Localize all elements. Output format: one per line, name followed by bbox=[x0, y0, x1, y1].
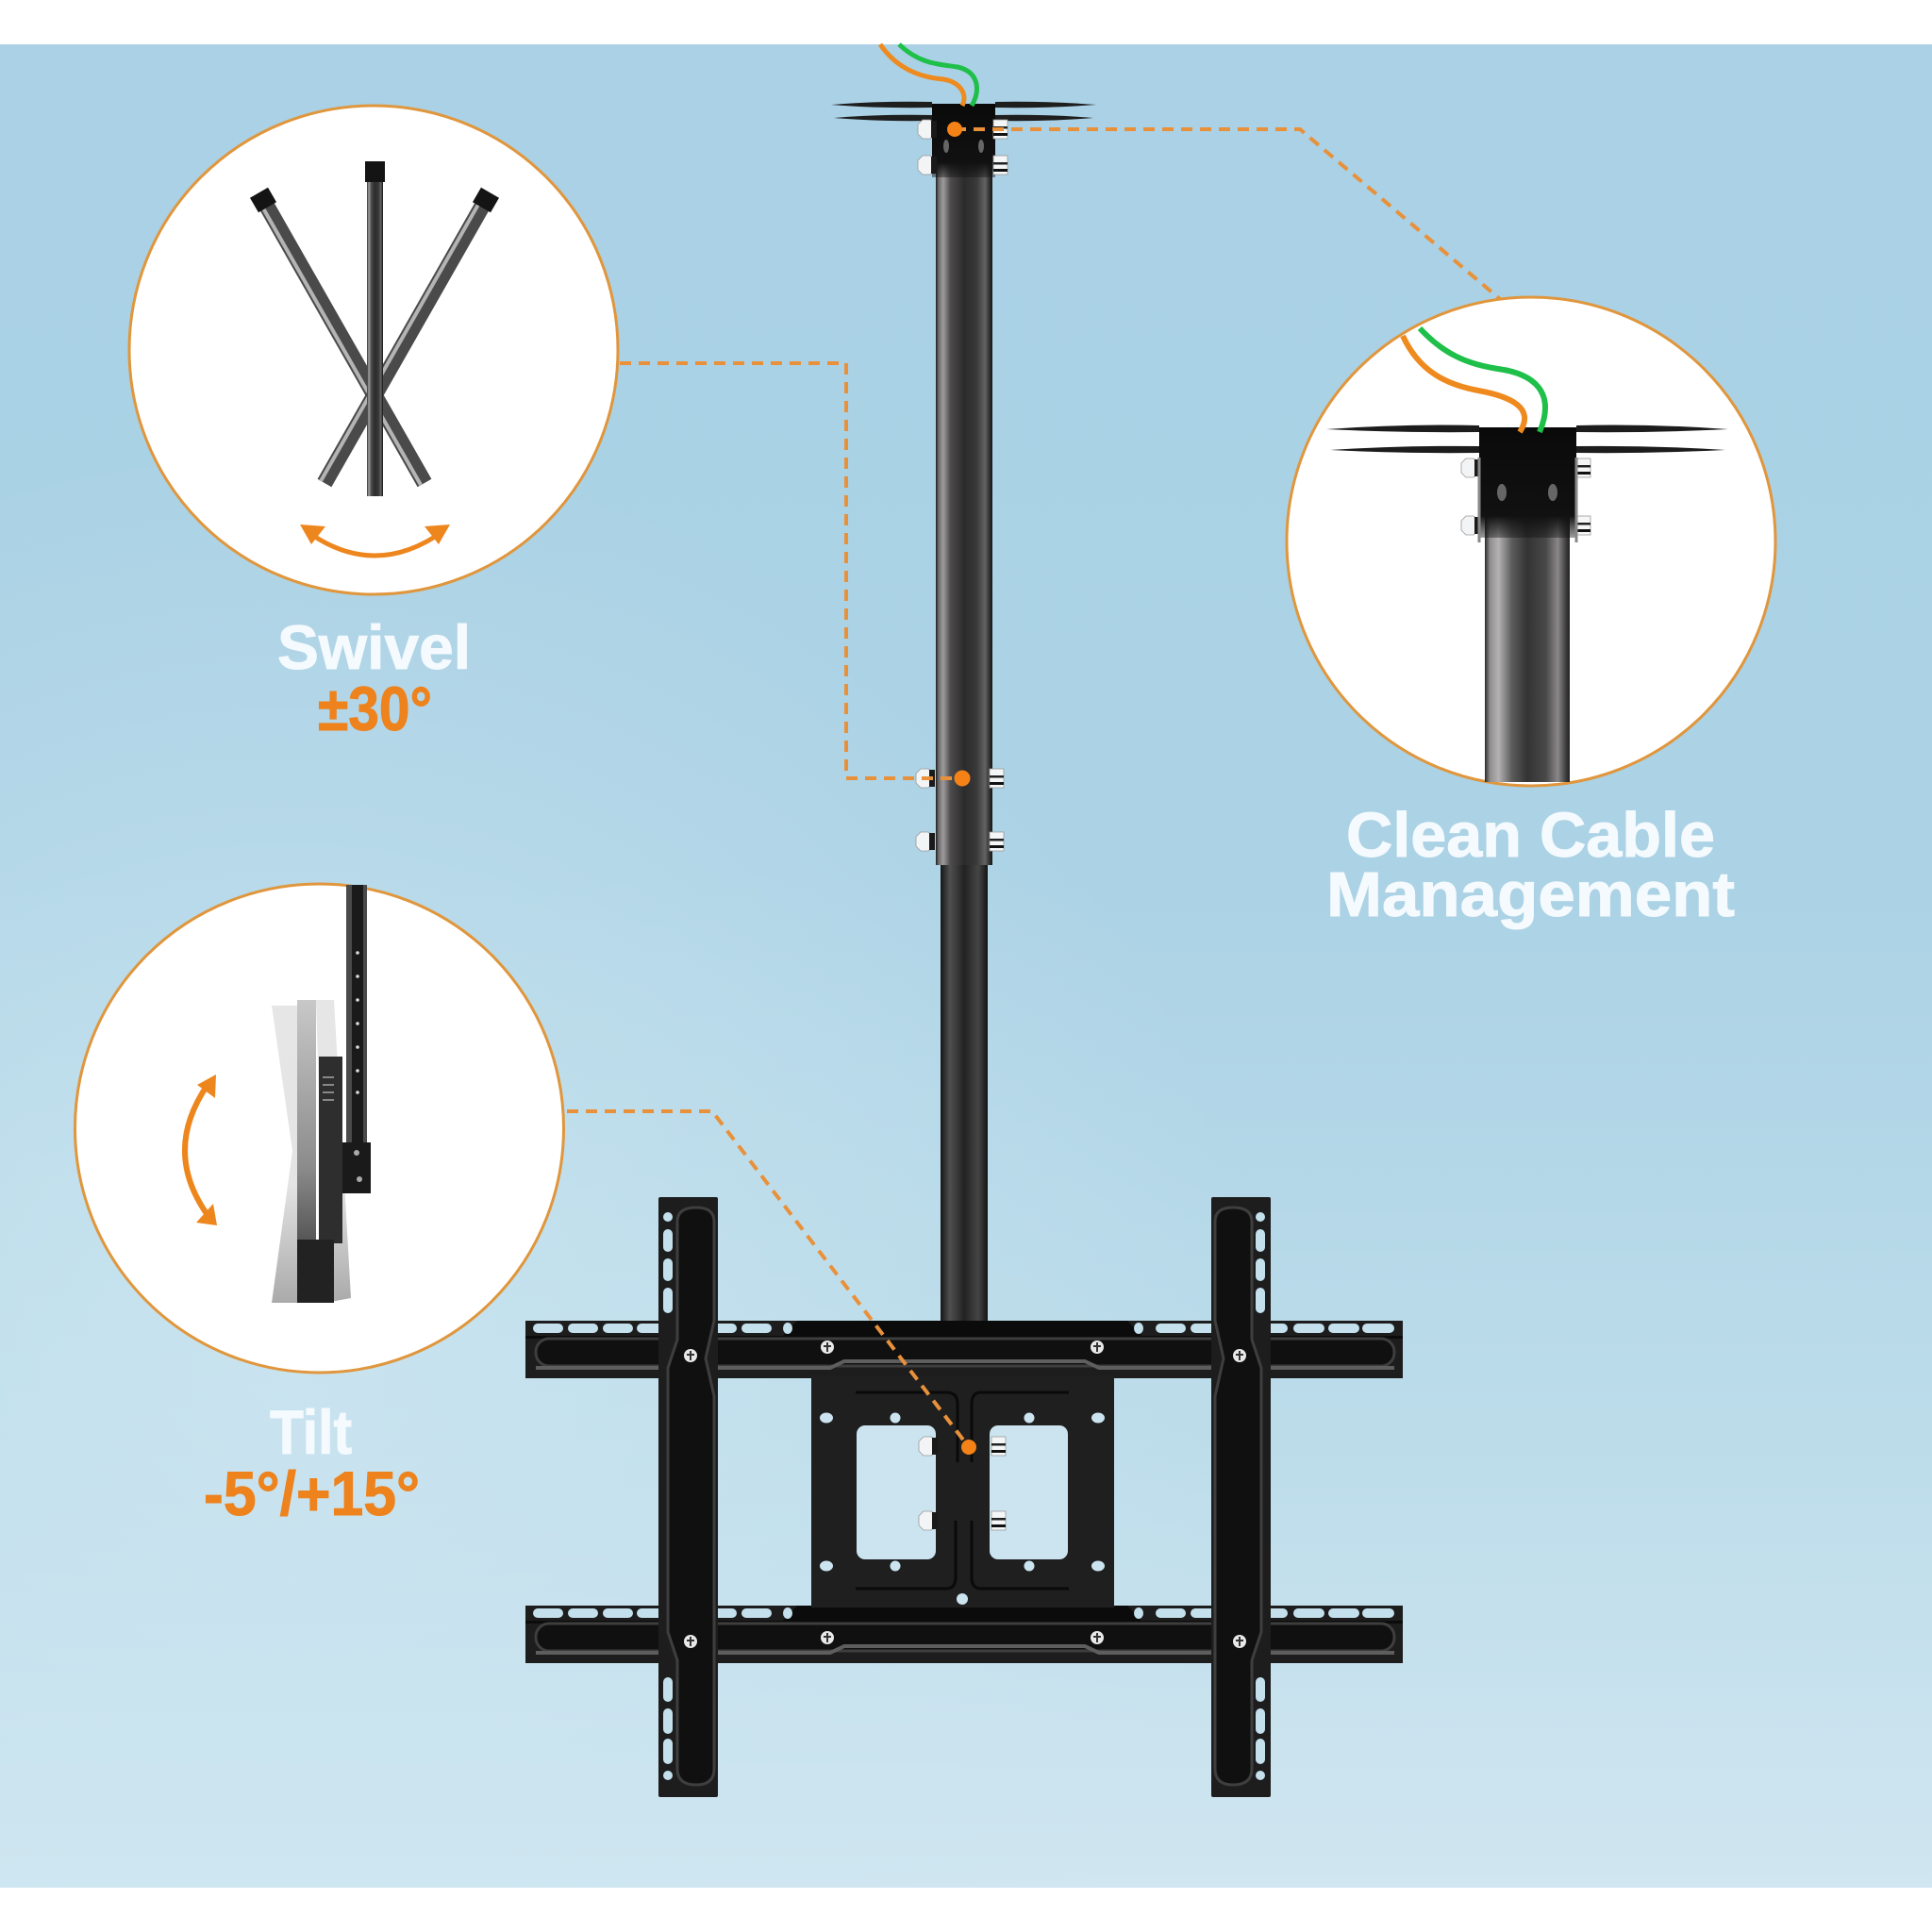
icon: tilt side view bbox=[272, 885, 371, 1303]
label: tilt: Tilt bbox=[270, 1397, 352, 1467]
label: swivel: Swivel bbox=[277, 612, 471, 682]
panel: clean cable management bbox=[1287, 297, 1775, 930]
top horizontal bar bbox=[525, 1321, 1403, 1378]
left vertical rail bbox=[658, 1197, 718, 1797]
upper pole bbox=[932, 104, 995, 865]
icon: three swivel poles bbox=[250, 161, 499, 496]
tilt circle bbox=[75, 884, 564, 1373]
cables: orange and green bbox=[880, 44, 976, 106]
arrow: swivel range bbox=[300, 525, 450, 556]
dashed leader: tilt bbox=[567, 1111, 976, 1455]
label: tilt value: -5°/+15° bbox=[204, 1458, 420, 1528]
arrow: tilt range bbox=[185, 1074, 217, 1225]
lower telescoping pole bbox=[941, 863, 988, 1325]
icon: enlarged pole top bbox=[1326, 425, 1728, 782]
bar screws bbox=[821, 1341, 1104, 1644]
dashed leader: cable management bbox=[947, 122, 1500, 299]
ceiling mount pole bbox=[831, 44, 1096, 1325]
label: swivel value: ±30° bbox=[318, 674, 432, 743]
ceiling plate disc bbox=[831, 102, 1096, 121]
TV wall plate bracket bbox=[525, 1197, 1403, 1797]
panel: swivel bbox=[129, 106, 618, 743]
label: management: Management bbox=[1326, 859, 1735, 930]
icon: cables bbox=[1403, 328, 1545, 432]
center plate with windows bbox=[811, 1375, 1114, 1607]
dashed leader: swivel bbox=[620, 363, 970, 787]
swivel circle bbox=[129, 106, 618, 594]
bottom horizontal bar bbox=[525, 1606, 1403, 1663]
label: clean cable: Clean Cable bbox=[1346, 800, 1715, 871]
panel: tilt bbox=[75, 884, 564, 1528]
cable circle bbox=[1287, 297, 1775, 786]
pole bolts bbox=[916, 120, 1008, 851]
right vertical rail bbox=[1211, 1197, 1271, 1797]
